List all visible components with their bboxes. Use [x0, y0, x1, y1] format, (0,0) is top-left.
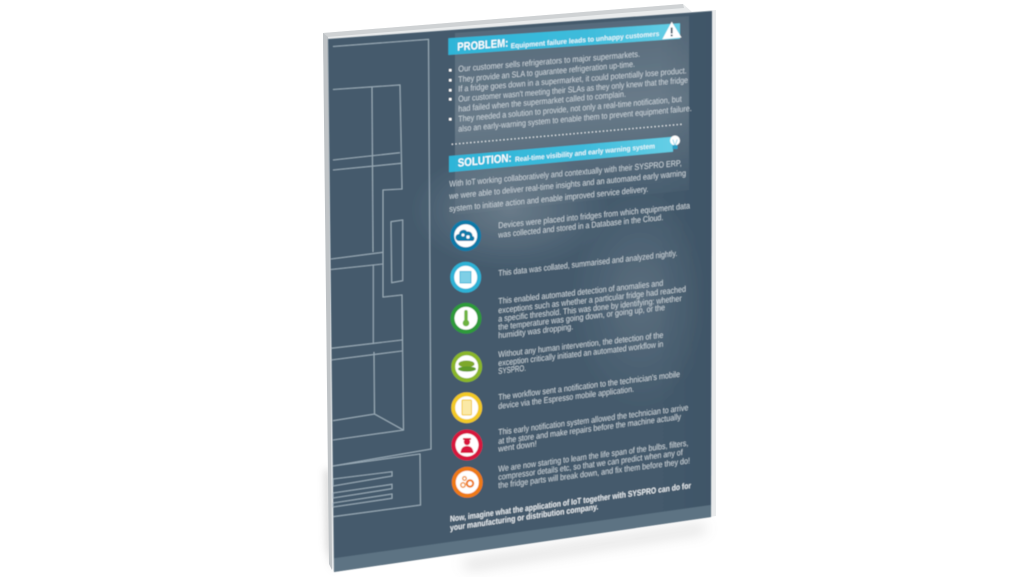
subheading: solution: Real-time visibility and early warning system: [515, 143, 655, 164]
step 7 text: the fridge parts will break down, and fix them before they do!: [498, 455, 690, 490]
step 3: [450, 278, 686, 340]
step 6 text: at the store and make repairs before the machine actually: [498, 411, 682, 446]
book shadows: [325, 470, 705, 572]
icon: processor chip: [450, 262, 481, 293]
icon: cloud: [450, 220, 481, 251]
step 5 text: device via the Espresso mobile application.: [498, 384, 634, 411]
heading: problem: PROBLEM:: [457, 38, 508, 54]
problem bullet list: [449, 49, 692, 134]
solution intro text: With IoT working collaboratively and contextually with their SYSPRO ERP,: [449, 158, 682, 189]
fridge line drawing: [331, 39, 431, 517]
closing statement: Now, imagine what the application of IoT together with SYSPRO can do for: [450, 480, 692, 524]
step 3 text: This enabled automated detection of anomalies and: [498, 278, 664, 306]
solution banner: [449, 137, 673, 172]
step 2: [450, 248, 677, 293]
step 4 text: exception critically initiated an automated workflow in: [498, 339, 664, 368]
solution intro text: [448, 158, 686, 214]
step 5 text: The workflow sent a notification to the technician's mobile: [498, 369, 680, 402]
cover gloss: [410, 11, 712, 523]
icon: light bulb: [670, 136, 680, 149]
footer band: [334, 505, 711, 572]
step 4 text: [498, 330, 664, 376]
step 5 text: [498, 369, 680, 411]
step 1 text: Devices were placed into fridges from which equipment data: [498, 200, 690, 230]
icon: gears: [452, 467, 483, 498]
icon: cloud and car: [451, 351, 482, 382]
closing statement: [450, 480, 692, 533]
step 7 text: [498, 438, 690, 490]
page cover: [328, 11, 712, 572]
problem banner: [448, 23, 680, 55]
problem bullet list: Our customer wasn't meeting their SLAs as they only knew that the fridge: [458, 75, 688, 104]
step 3 text: [498, 278, 686, 340]
step 4 text: Without any human intervention, the detection of the: [498, 330, 664, 359]
icon: mobile phone: [451, 392, 482, 423]
solution intro text: system to initiate action and enable improved service delivery.: [449, 184, 648, 214]
step 6: [452, 402, 689, 460]
icon: warning triangle: [662, 22, 682, 39]
step 6 text: [497, 402, 689, 454]
problem bullet list: had failed when the supermarket called to complain.: [458, 89, 626, 114]
step 7 text: compressor details etc, so that we can predict when any of: [498, 447, 683, 482]
step 2 text: This data was collated, summarised and analyzed nightly.: [498, 248, 677, 278]
step 1: [450, 200, 690, 251]
step 7 text: We are now starting to learn the life span of the bulbs, filters,: [498, 438, 688, 474]
step 3 text: exceptions such as whether a particular fridge had reached: [498, 284, 686, 315]
heading: solution: SOLUTION:: [458, 153, 512, 170]
problem bullet list: They needed a solution to provide, not only a real-time notification, but: [458, 94, 682, 124]
icon: thermometer: [450, 303, 482, 334]
step 6 text: This early notification system allowed the technician to arrive: [498, 402, 689, 437]
icon: technician: [452, 430, 482, 460]
solution intro text: we were able to deliver real-time insights and an automated early warning: [448, 168, 686, 201]
book page edges: [323, 4, 716, 572]
problem bullet list: also an early-warning system to enable them to prevent equipment failure.: [458, 103, 692, 134]
step 4: [451, 330, 664, 382]
step 6 text: went down!: [497, 438, 537, 454]
problem bullet list: Our customer sells refrigerators to major supermarkets.: [458, 49, 640, 74]
step 1 text: was collected and stored in a Database in the Cloud.: [497, 212, 663, 240]
step 3 text: humidity was dropping.: [498, 321, 573, 340]
subheading: problem: Equipment failure leads to unhappy customers: [511, 31, 659, 50]
step 4 text: SYSPRO.: [498, 363, 526, 376]
step 5: [451, 369, 680, 423]
problem bullet list: They provide an SLA to guarantee refrigeration up-time.: [458, 59, 635, 84]
step 7: [452, 438, 690, 498]
step 3 text: the temperature was going down, or going up, or the: [498, 302, 665, 332]
problem bullet list: If a fridge goes down in a supermarket, it could potentially lose product.: [458, 65, 687, 94]
closing statement: your manufacturing or distribution company.: [450, 501, 598, 533]
step 3 text: a specific threshold. This was done by identifying: whether: [498, 293, 682, 324]
